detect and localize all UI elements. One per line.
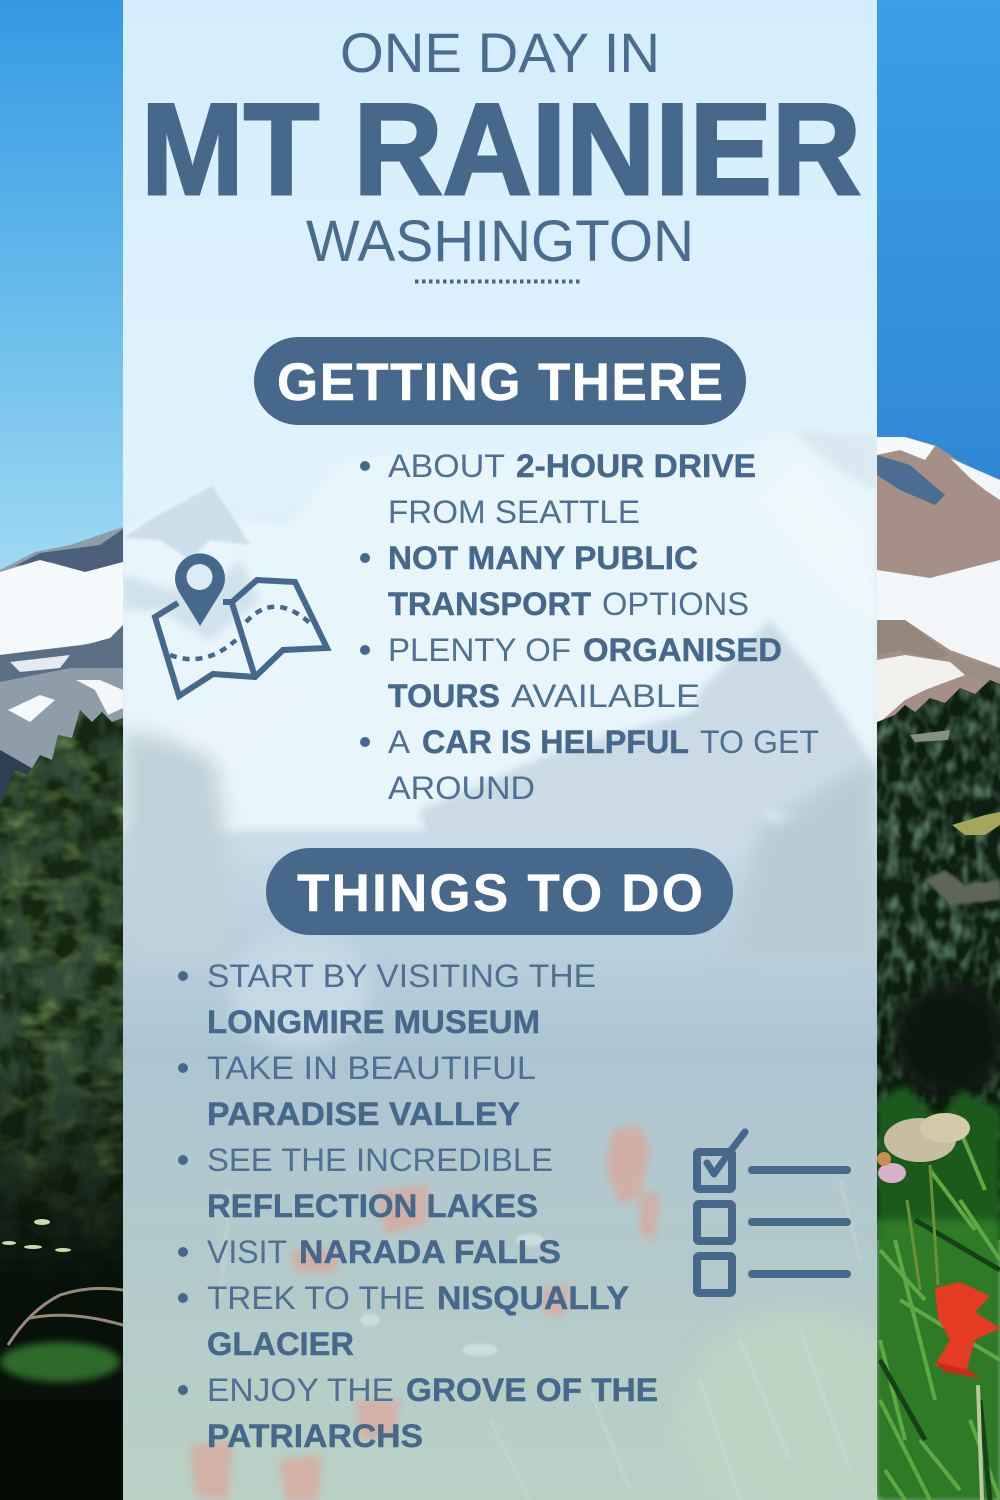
panel: translucent centre column with faded photo [123,0,920,1500]
item: grove of the patriarchs [178,1372,658,1454]
item: two-hour drive: ABOUT [388,448,505,484]
item: grove of the patriarchs: PATRIARCHS [207,1418,423,1454]
item: narada falls [178,1234,561,1270]
item: organised tours: TOURS [388,678,500,714]
item: public transport: NOT MANY PUBLIC [388,540,698,576]
list: getting there [360,448,819,806]
icon: folded map with location pin [155,553,327,696]
item: organised tours: PLENTY OF [388,632,571,668]
item: two-hour drive [360,448,756,530]
title: MT RAINIER [141,76,861,222]
photo: left strip, glacier and conifer [0,0,123,1500]
item: car helpful: TO GET [700,724,819,760]
item: longmire museum [178,958,596,1040]
item: public transport: OPTIONS [602,586,749,622]
heading: getting there [254,337,746,425]
item: paradise valley [178,1050,536,1132]
item: organised tours: AVAILABLE [511,678,700,714]
title: WASHINGTON [306,209,694,274]
item: organised tours [360,632,782,714]
heading: things to do: THINGS TO DO [297,864,703,923]
item: nisqually glacier: TREK TO THE [207,1280,425,1316]
item: nisqually glacier [178,1280,629,1362]
title [141,21,861,274]
item: public transport: TRANSPORT [388,586,591,622]
item: longmire museum: LONGMIRE MUSEUM [207,1004,540,1040]
item: public transport [360,540,749,622]
list: things to do [178,958,658,1454]
item: grove of the patriarchs: GROVE OF THE [406,1372,658,1408]
item: car helpful: CAR IS HELPFUL [422,724,689,760]
item: nisqually glacier: GLACIER [207,1326,354,1362]
heading: things to do [266,848,733,935]
item: reflection lakes: SEE THE INCREDIBLE [207,1142,553,1178]
item: reflection lakes [178,1142,553,1224]
item: car helpful [360,724,819,806]
item: grove of the patriarchs: ENJOY THE [207,1372,394,1408]
item: two-hour drive: 2-HOUR DRIVE [516,448,756,484]
title: ONE DAY IN [340,21,660,84]
item: paradise valley: TAKE IN BEAUTIFUL [207,1050,536,1086]
item: car helpful: AROUND [388,770,535,806]
photo: right strip, Rainier and wildflowers [877,0,1000,1500]
item: paradise valley: PARADISE VALLEY [207,1096,520,1132]
item: two-hour drive: FROM SEATTLE [388,494,640,530]
item: reflection lakes: REFLECTION LAKES [207,1188,538,1224]
item: longmire museum: START BY VISITING THE [207,958,596,994]
heading: getting there: GETTING THERE [277,353,723,412]
item: nisqually glacier: NISQUALLY [437,1280,629,1316]
item: narada falls: NARADA FALLS [299,1234,561,1270]
item: narada falls: VISIT [207,1234,287,1270]
item: car helpful: A [388,724,411,760]
item: organised tours: ORGANISED [583,632,782,668]
icon: checklist [697,1132,847,1293]
